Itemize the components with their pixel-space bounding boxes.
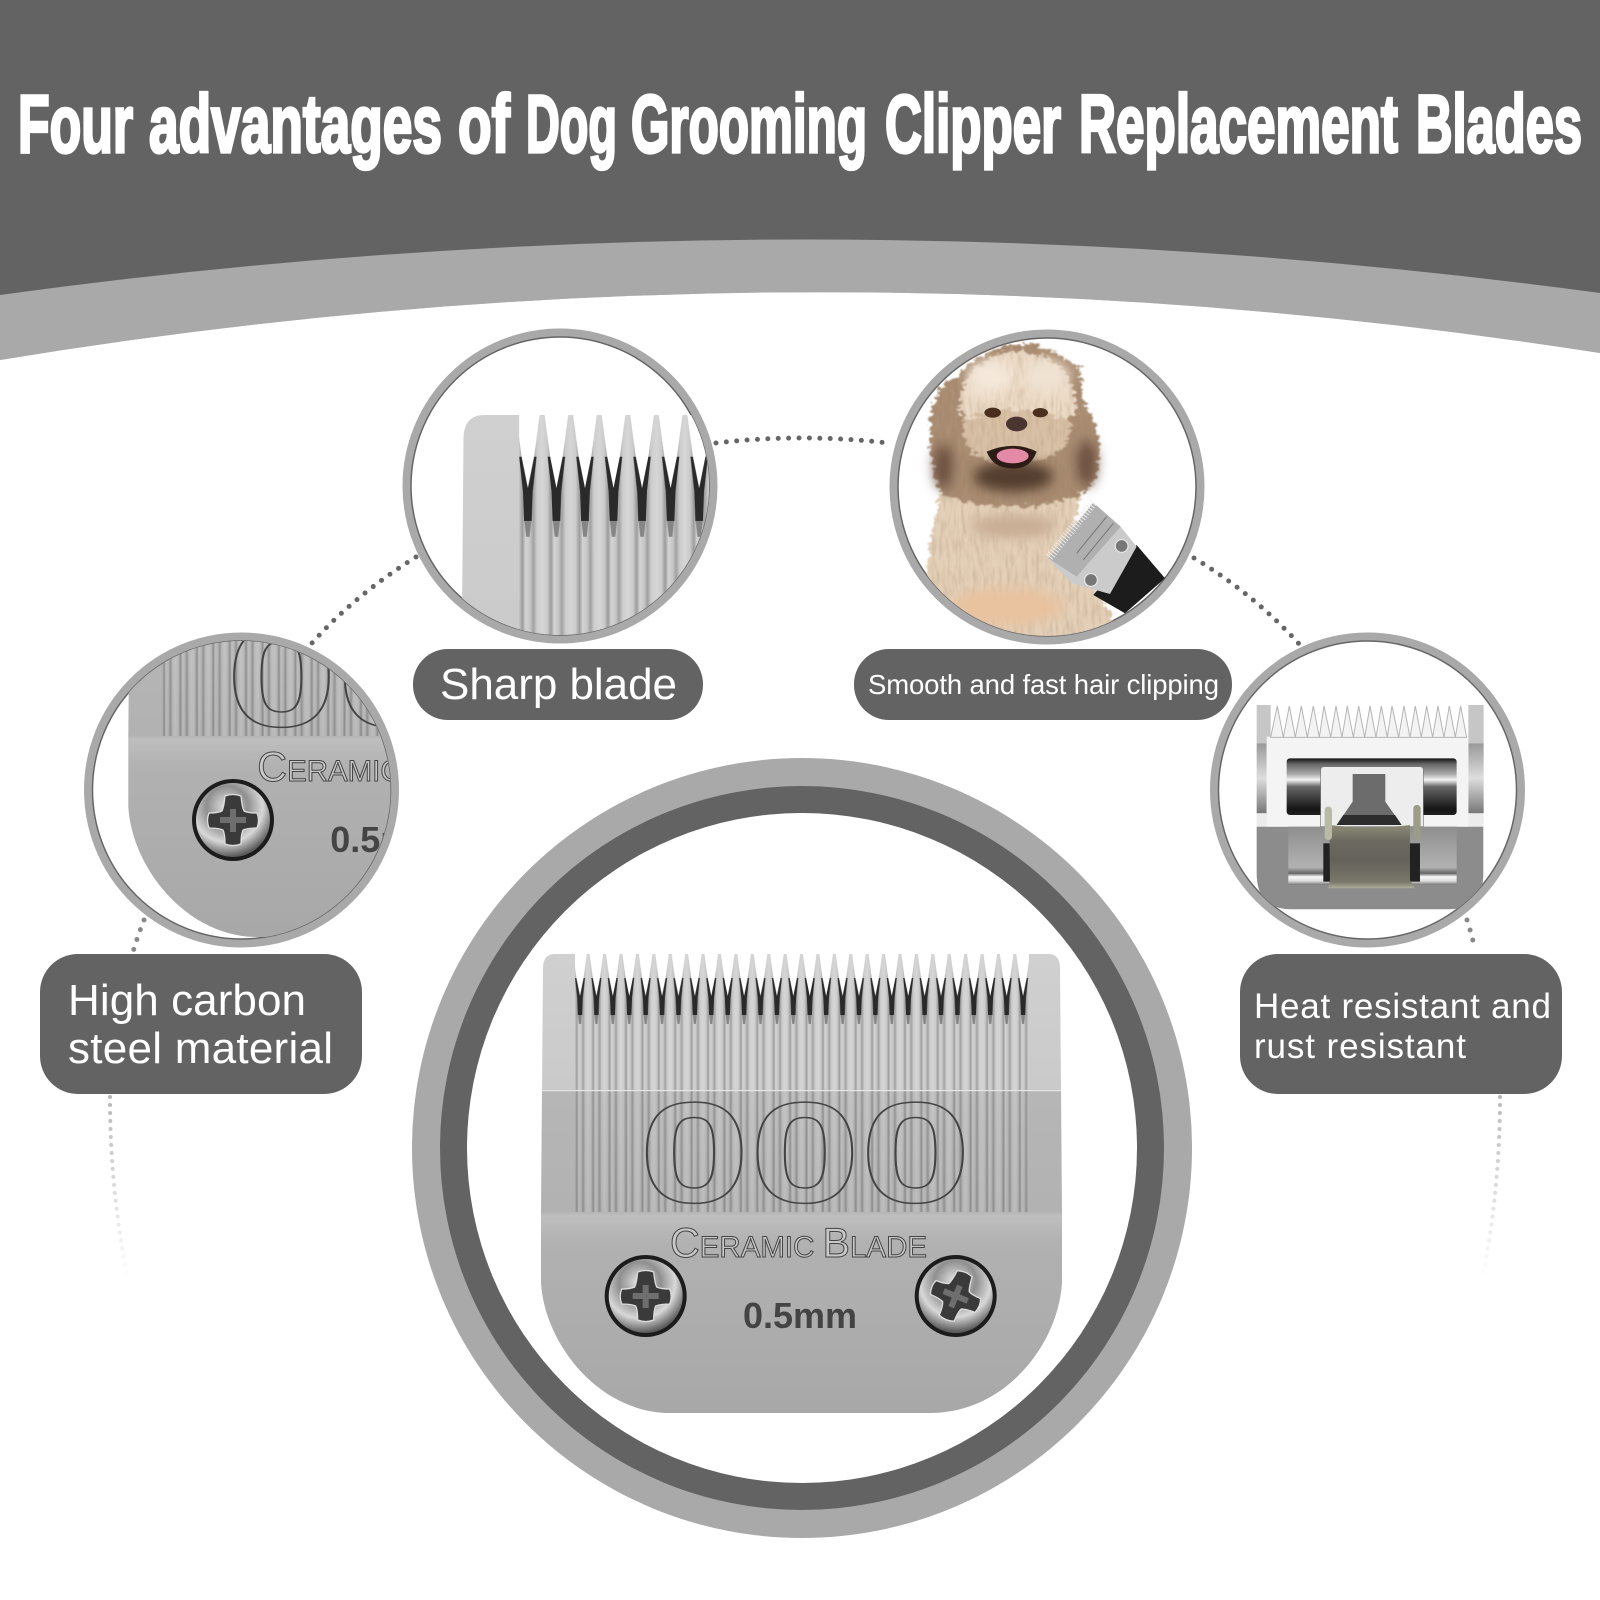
title: Dog <box>526 79 617 170</box>
title: advantages <box>149 79 442 170</box>
blade size marking 000: 000 <box>639 1074 971 1233</box>
label: smooth and fast hair clipping <box>854 649 1232 720</box>
label: high carbon steel material: High carbon <box>68 976 306 1025</box>
title <box>18 79 1582 170</box>
zoomed blade corner: CERAMIC BLADE <box>257 743 514 790</box>
label: heat and rust resistant: Heat resistant and <box>1254 987 1551 1026</box>
label: high carbon steel material <box>40 954 362 1094</box>
panel: high carbon steel circle <box>84 632 399 948</box>
zoomed blade teeth <box>462 415 709 635</box>
title: Clipper <box>885 79 1061 170</box>
panel: heat resistant circle <box>1214 636 1521 944</box>
right screw <box>902 1243 1009 1349</box>
zoomed blade corner: 0.5mm <box>330 819 444 860</box>
label: heat and rust resistant: rust resistant <box>1254 1027 1466 1066</box>
dog photo illustration <box>926 343 1165 647</box>
main ceramic blade <box>541 954 1062 1413</box>
dog eyes, nose, tongue <box>984 408 1048 468</box>
panel: dog and clipper circle <box>894 334 1200 647</box>
blade size 0.5mm: 0.5mm <box>743 1295 857 1336</box>
header band <box>0 0 1600 372</box>
panel: central blade ring <box>412 758 1192 1538</box>
clipper head <box>1048 503 1165 613</box>
panel: sharp blade circle <box>402 328 718 644</box>
label: sharp blade <box>413 649 703 720</box>
label: heat and rust resistant <box>1240 954 1562 1094</box>
title: Four <box>18 79 133 170</box>
title: of <box>458 79 510 170</box>
label: smooth and fast hair clipping: Smooth and fast hair clipping <box>868 669 1219 700</box>
ceramic blade engraving: CERAMIC BLADE <box>670 1219 927 1266</box>
zoomed blade corner: 000 <box>226 598 558 757</box>
title: Grooming <box>631 79 867 170</box>
center plate <box>1321 767 1423 827</box>
white teeth <box>1271 706 1467 737</box>
label: sharp blade: Sharp blade <box>440 660 677 709</box>
bronze clip <box>1323 843 1420 882</box>
blade back view <box>1257 705 1484 909</box>
left screw <box>605 1255 687 1337</box>
dotted connectors <box>110 438 1500 1280</box>
zoomed blade corner <box>128 641 390 937</box>
label: high carbon steel material: steel material <box>68 1024 333 1073</box>
title: Replacement <box>1079 79 1398 170</box>
